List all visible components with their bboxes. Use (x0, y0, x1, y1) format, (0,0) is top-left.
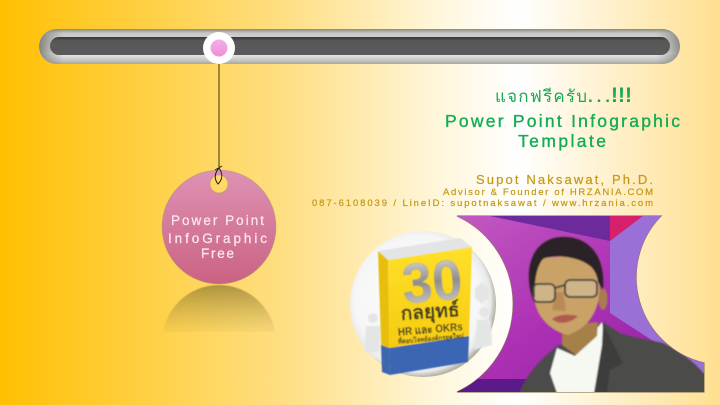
book disc (350, 231, 496, 377)
book spine (378, 251, 390, 375)
purple wall (457, 216, 704, 392)
title: Power Point Infographic (445, 111, 680, 131)
tag label: Free (201, 246, 234, 261)
photo panel (440, 216, 710, 396)
hanging string (218, 62, 220, 167)
timeline knob (203, 32, 235, 64)
book pages top (378, 238, 472, 260)
cover number: 30 (399, 247, 465, 315)
book (378, 238, 472, 375)
jacket (519, 322, 706, 393)
giveaway heading: !!! (611, 84, 632, 107)
title: Template (518, 131, 606, 151)
giveaway heading (495, 84, 632, 107)
author details: Supot Naksawat, Ph.D. (476, 172, 653, 187)
tag label: InfoGraphic (168, 231, 267, 246)
shirt (550, 322, 606, 393)
hair (529, 237, 603, 297)
neck (562, 322, 598, 355)
face (533, 255, 600, 335)
author details: Advisor & Founder of HRZANIA.COM (443, 187, 653, 198)
lapel (594, 323, 623, 393)
silhouettes behind book (364, 282, 492, 352)
tag label (168, 213, 267, 261)
timeline bar (39, 29, 680, 64)
hanging tag (162, 170, 276, 284)
author details (312, 172, 653, 209)
reflection of tag (164, 284, 274, 330)
cover title: ที่ตอบโจทย์องค์กรยุคใหม่ (398, 330, 464, 346)
blue band (389, 336, 469, 375)
book cover (388, 247, 472, 348)
cover title: กลยุทธ์ (400, 299, 460, 326)
cover title (397, 299, 464, 346)
title (445, 111, 680, 151)
giveaway heading: แจกฟรีครับ (495, 87, 587, 106)
giveaway heading: ... (588, 87, 610, 106)
mouth (552, 315, 578, 323)
tag label: Power Point (171, 213, 264, 228)
cover title: HR และ OKRs (397, 321, 463, 339)
nose (552, 292, 566, 311)
author details: 087-6108039 / LineID: supotnaksawat / www.hrzania.com (312, 198, 653, 209)
glasses (533, 280, 597, 302)
ear (598, 288, 608, 310)
string knot (215, 166, 222, 184)
